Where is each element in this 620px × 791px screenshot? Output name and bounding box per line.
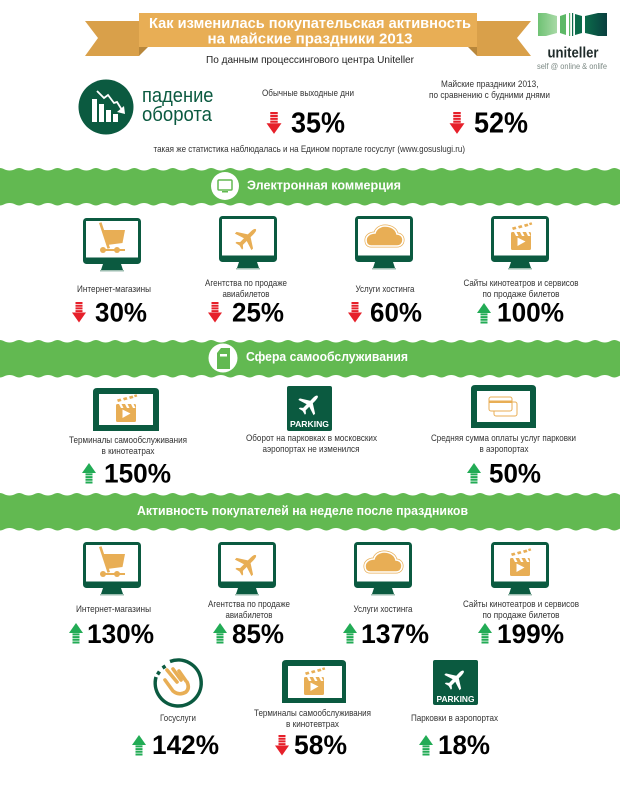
item: hosting after holidays: 137% xyxy=(361,619,429,649)
item: airport parking xyxy=(411,660,498,760)
item: terminals in cinemas: Терминалы самообслуживания xyxy=(254,708,371,719)
item: terminals in cinemas: в кинотевтрах xyxy=(286,719,339,730)
stat: May holidays 2013 xyxy=(429,79,550,140)
item: airport parking turnover: Оборот на парковках в московских xyxy=(246,433,377,444)
item: cinema sites after holidays: 199% xyxy=(497,619,564,649)
item: airport parking turnover: PARKING xyxy=(290,419,329,429)
item: online stores after holidays xyxy=(69,542,154,649)
item: online stores after holidays: 130% xyxy=(87,619,154,649)
stat: May holidays 2013: по сравнению с будними днями xyxy=(429,90,550,101)
stat: regular weekends: Обычные выходные дни xyxy=(262,88,354,99)
stat: May holidays 2013: 52% xyxy=(474,108,528,140)
item: cinema self-service terminals: в кинотеатрах xyxy=(102,446,155,457)
item: cinema sites after holidays xyxy=(463,542,579,649)
stat: regular weekends xyxy=(262,88,354,140)
icon: turnover falling chart xyxy=(78,80,134,134)
logo: uniteller: uniteller xyxy=(548,44,599,62)
item: hosting services xyxy=(348,216,422,328)
item: airline ticket agencies: Агентства по продаже xyxy=(205,278,287,289)
item: average parking payment: Средняя сумма оплаты услуг парковки xyxy=(431,433,576,444)
item: airport parking: PARKING xyxy=(436,694,475,704)
item: airline ticket agencies xyxy=(205,216,287,328)
item: ticket agencies after holidays: 85% xyxy=(232,619,284,649)
item: hosting services: Услуги хостинга xyxy=(356,284,415,295)
section band: self-service xyxy=(0,339,620,378)
icon: kiosk badge xyxy=(208,344,238,372)
item: average parking payment: 50% xyxy=(489,458,541,488)
subtitle: По данным процессингового центра Uniteller xyxy=(206,54,414,66)
item: average parking payment: в аэропортах xyxy=(480,444,529,455)
item: online stores xyxy=(72,218,151,328)
item: hosting services: 60% xyxy=(370,298,422,328)
heading: падение оборота xyxy=(142,85,214,126)
item: gosuslugi: 142% xyxy=(152,730,219,760)
item: gosuslugi: Госуслуги xyxy=(160,713,196,724)
item: cinema self-service terminals: Терминалы самообслуживания xyxy=(69,435,187,446)
logo: uniteller xyxy=(537,13,607,71)
item: cinema self-service terminals xyxy=(69,388,187,488)
item: airline ticket agencies: авиабилетов xyxy=(222,289,270,300)
item: cinema and ticket sites: 100% xyxy=(497,298,564,328)
item: hosting after holidays xyxy=(343,542,429,649)
item: cinema sites after holidays: по продаже билетов xyxy=(482,610,560,621)
item: online stores: 30% xyxy=(95,298,147,328)
item: ticket agencies after holidays: авиабилетов xyxy=(226,610,272,621)
item: hosting after holidays: Услуги хостинга xyxy=(354,604,413,615)
note: gosuslugi: такая же статистика наблюдалась и на Едином портале госуслуг (www.gosuslugi.ru) xyxy=(154,144,465,155)
item: cinema and ticket sites: Сайты кинотеатров и сервисов xyxy=(464,278,578,289)
title ribbon xyxy=(85,13,531,56)
item: average parking payment xyxy=(431,385,576,488)
item: online stores: Интернет-магазины xyxy=(77,284,151,295)
icon: monitor badge xyxy=(211,172,239,200)
section band: e-commerce xyxy=(0,167,620,206)
item: cinema and ticket sites xyxy=(464,216,578,328)
section band: week after holidays xyxy=(0,492,620,532)
item: terminals in cinemas: 58% xyxy=(294,730,347,760)
item: airport parking: 18% xyxy=(438,730,490,760)
item: airline ticket agencies: 25% xyxy=(232,298,284,328)
item: airport parking turnover xyxy=(246,386,377,455)
stat: May holidays 2013: Майские праздники 2013, xyxy=(441,79,538,90)
item: gosuslugi xyxy=(132,660,219,760)
logo: uniteller: self @ online & onlife xyxy=(537,61,607,71)
heading: падение оборота: оборота xyxy=(142,104,213,126)
item: terminals in cinemas xyxy=(254,660,371,760)
title ribbon: на майские праздники 2013 xyxy=(208,30,412,48)
item: cinema and ticket sites: по продаже билетов xyxy=(482,289,560,300)
item: ticket agencies after holidays xyxy=(208,542,290,649)
item: cinema sites after holidays: Сайты кинотеатров и сервисов xyxy=(463,599,579,610)
title ribbon: Как изменилась покупательская активность xyxy=(149,15,471,32)
item: online stores after holidays: Интернет-магазины xyxy=(76,604,151,615)
item: airport parking: Парковки в аэропортах xyxy=(411,713,498,724)
heading: падение оборота: падение xyxy=(142,85,214,107)
item: airport parking turnover: аэропортах не изменился xyxy=(262,444,360,455)
stat: regular weekends: 35% xyxy=(291,108,345,140)
section band: self-service: Сфера самообслуживания xyxy=(246,349,408,364)
section band: week after holidays: Активность покупателей на неделе после праздников xyxy=(137,503,468,518)
item: cinema self-service terminals: 150% xyxy=(104,458,171,488)
section band: e-commerce: Электронная коммерция xyxy=(247,178,401,192)
item: ticket agencies after holidays: Агентства по продаже xyxy=(208,599,290,610)
